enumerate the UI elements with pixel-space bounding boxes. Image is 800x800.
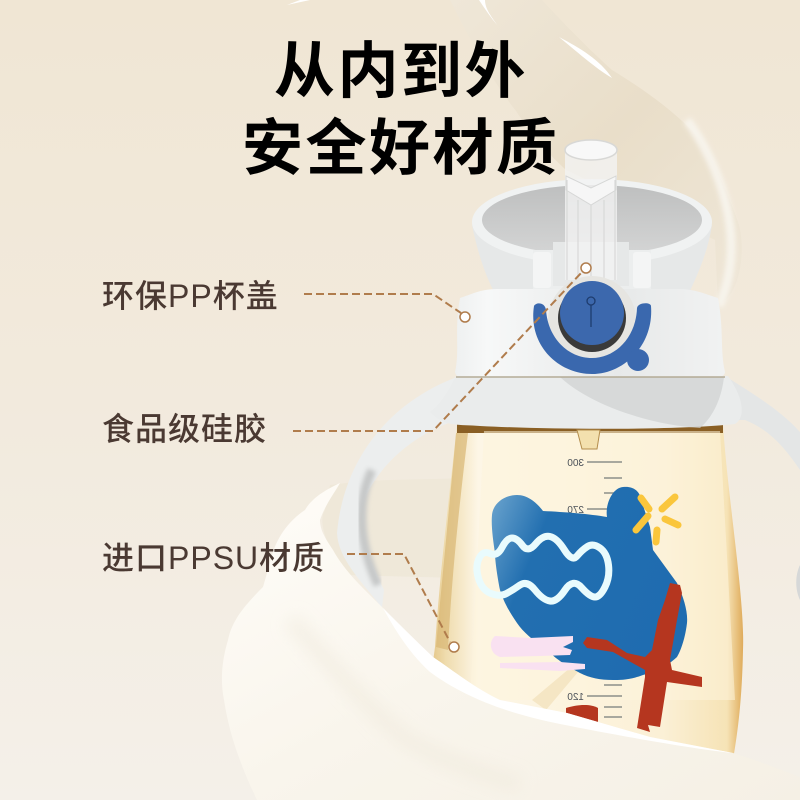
bear illustration xyxy=(477,487,702,732)
front milk swirl xyxy=(222,483,800,800)
milk splash behind bottle xyxy=(287,0,742,578)
yellow rays xyxy=(636,497,678,542)
title: 安全好材质 xyxy=(242,114,560,182)
title xyxy=(242,37,560,182)
measurement scale: 270 xyxy=(567,505,584,516)
red brush mark xyxy=(583,583,702,732)
bottle body xyxy=(420,424,743,760)
dome under lid xyxy=(430,376,742,429)
callout: 环保PP杯盖 xyxy=(102,278,470,322)
measurement scale: 120 xyxy=(567,692,584,703)
straw inside bottle xyxy=(532,668,578,710)
straw xyxy=(565,140,617,280)
pink brush marks xyxy=(491,636,585,671)
measurement scale: 300 xyxy=(567,458,584,469)
button assembly xyxy=(533,276,651,374)
right handle xyxy=(725,376,800,470)
title: 从内到外 xyxy=(274,37,528,105)
bear squiggle xyxy=(477,536,609,601)
lid band xyxy=(455,289,725,377)
red mark at bottle base xyxy=(566,705,598,722)
callout: 食品级硅胶: 食品级硅胶 xyxy=(102,411,267,447)
left handle xyxy=(337,376,460,608)
callout: 进口PPSU材质: 进口PPSU材质 xyxy=(102,540,325,576)
right handle stub xyxy=(796,565,800,600)
bear body xyxy=(492,487,687,680)
callout: 环保PP杯盖: 环保PP杯盖 xyxy=(102,278,279,314)
bottle product xyxy=(337,140,800,760)
flip lid bowl xyxy=(472,179,712,297)
measurement scale xyxy=(567,430,622,717)
callout: 食品级硅胶 xyxy=(102,263,591,447)
callout: 进口PPSU材质 xyxy=(102,540,459,652)
shadow under lid xyxy=(560,377,724,428)
